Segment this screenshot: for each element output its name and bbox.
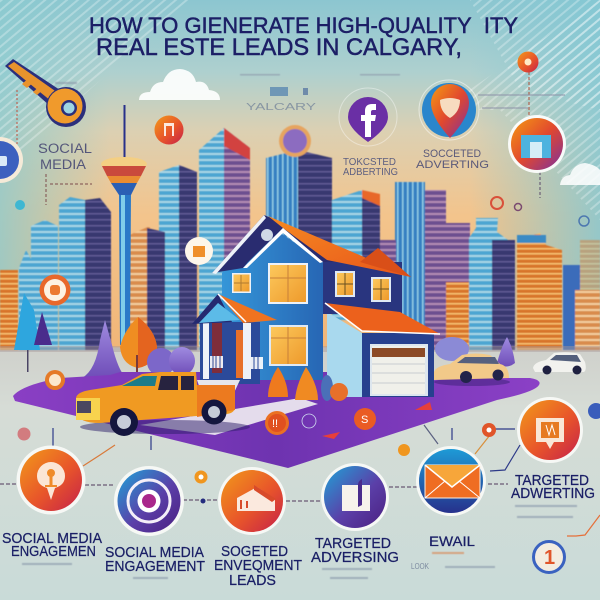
label: targeted advertising (311, 535, 399, 566)
circle 3: home leads (218, 467, 286, 535)
label: social media engagement 2: ENGAGEMENT (105, 558, 205, 575)
label: societed advertising (416, 148, 489, 171)
stairs (197, 380, 240, 397)
small Calgary sign: YALCARY (246, 102, 316, 113)
icon: key (5, 59, 86, 127)
icon: left edge circle (0, 137, 23, 183)
car white (533, 352, 586, 374)
cloud right (560, 163, 600, 185)
upper windows (268, 263, 308, 304)
title: REAL ESTE LEADS IN CALGARY, (96, 34, 462, 61)
label: targeted advertising right: ADWERTING (511, 485, 595, 502)
truck (76, 372, 250, 436)
circle 7: numbered badge: 1 (544, 547, 555, 569)
icon: right edge badge (588, 403, 600, 419)
label: social media engagement 1 (2, 530, 102, 560)
label: soceted envement leads: SOGETED (221, 543, 288, 560)
house (192, 215, 440, 401)
lower window (269, 325, 308, 366)
circle 7: numbered badge (534, 542, 564, 572)
gable (243, 228, 323, 268)
circle 2: target (114, 466, 184, 536)
purple lot (13, 372, 540, 468)
label: email: EWAIL (429, 533, 475, 549)
icon: small orange badge (518, 52, 538, 118)
main roof (212, 215, 411, 277)
label: soceted envement leads: ENVEQMENT (214, 557, 302, 574)
circle 4: blue purple (321, 463, 389, 531)
label: social media engagement 1: SOCIAL MEDIA (2, 530, 102, 547)
title (89, 13, 518, 61)
garage door (370, 344, 428, 396)
ground band (0, 346, 600, 352)
bushes (268, 367, 288, 397)
label: social media engagement 1: ENGAGEMEN (11, 543, 96, 560)
small Calgary sign (246, 87, 316, 113)
label: targeted advertising: ADVERSING (311, 549, 399, 566)
cloud top (139, 69, 220, 100)
trees (14, 293, 515, 378)
label: social media engagement 2: SOCIAL MEDIA (105, 544, 204, 561)
circle 1: social media engagement (16, 446, 86, 514)
label: targeted advertising right: TARGETED (515, 472, 589, 489)
label: social media engagement 2 (105, 544, 205, 575)
label: soceted envement leads: LEADS (229, 572, 276, 589)
label: email: LOOK (411, 562, 430, 571)
icon: advertising badge (508, 115, 566, 173)
garage body (327, 312, 362, 397)
Calgary Tower (101, 105, 147, 345)
main body (222, 222, 323, 380)
lot badges: S (361, 414, 368, 426)
icon: location pin (419, 80, 479, 140)
circle 5: email (416, 446, 486, 516)
faint captions (22, 74, 577, 579)
small skyline badges (15, 197, 589, 306)
label: societed advertising: SOCCETED (423, 148, 481, 160)
circle 6: targeted advertising (517, 397, 583, 463)
skyline (0, 125, 600, 350)
label: targeted advertising: TARGETED (315, 535, 391, 552)
label: social media (38, 141, 93, 172)
car tan (434, 354, 510, 386)
label: societed advertising: ADVERTING (416, 159, 489, 171)
icon: orange pin badge (154, 116, 184, 144)
connector lines top (17, 90, 565, 205)
label: soceted envement leads (214, 543, 302, 589)
label: targeted advertising right (511, 472, 595, 502)
garage roof (325, 303, 440, 334)
lot badges (45, 370, 432, 439)
label: targeted advertising small (343, 157, 398, 178)
lot badges: !! (272, 418, 278, 430)
connectors (0, 423, 600, 536)
label: social media: SOCIAL (38, 141, 93, 156)
label: targeted advertising small: TOKCSTED (343, 157, 396, 168)
label: email (411, 533, 475, 571)
label: targeted advertising small: ADBERTING (343, 167, 398, 178)
porch (200, 322, 260, 384)
title: HOW TO GIENERATE HIGH-QUALITY ITY (89, 13, 518, 38)
label: social media: MEDIA (40, 157, 86, 172)
icon: facebook pin (339, 88, 397, 146)
